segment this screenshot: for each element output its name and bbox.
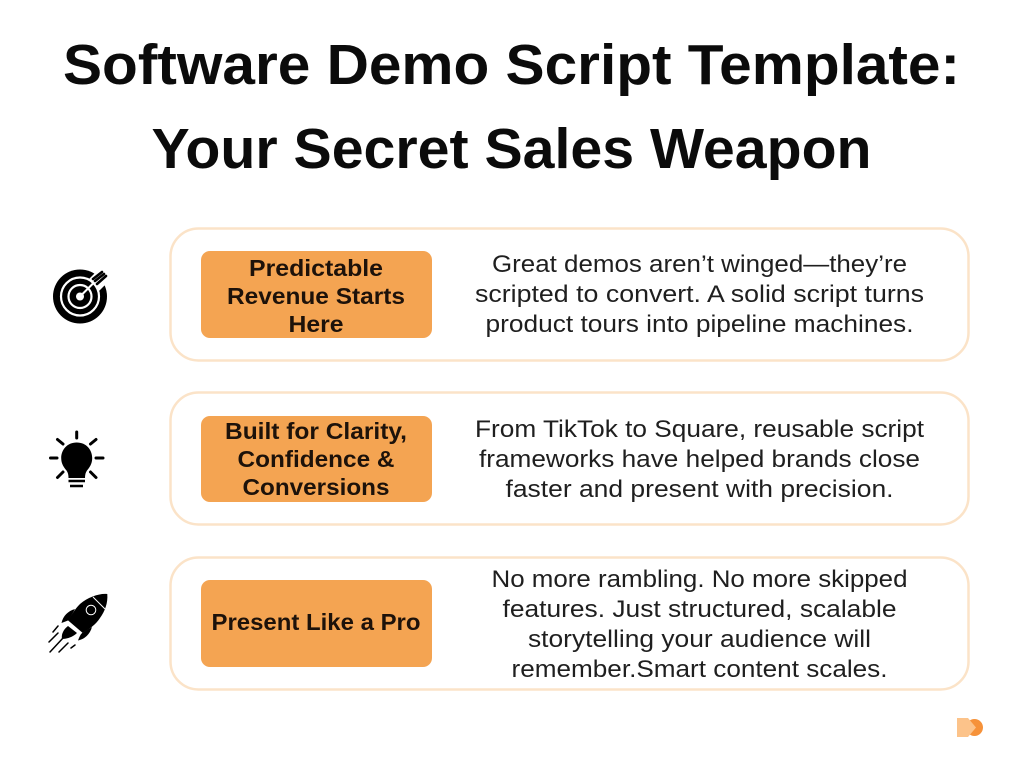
text: predictable revenue description: product tours into pipeline machines. xyxy=(486,311,914,338)
text: present description: remember.Smart content scales. xyxy=(512,656,888,683)
panel: clarity and confidence xyxy=(170,392,968,524)
text: predictable revenue description: scripted to convert. A solid script turns xyxy=(475,281,924,308)
text: present description: features. Just structured, scalable xyxy=(502,596,896,623)
text: present description xyxy=(492,566,908,683)
panel: predictable revenue xyxy=(170,228,968,360)
badge: predictable revenue: Revenue Starts xyxy=(227,283,405,309)
badge: clarity and confidence xyxy=(201,416,432,502)
icon: rocket xyxy=(49,594,107,652)
text: clarity description: faster and present with precision. xyxy=(506,476,894,503)
icon: light bulb xyxy=(50,432,103,486)
text: clarity description: From TikTok to Square, reusable script xyxy=(475,416,924,443)
text: predictable revenue description xyxy=(475,251,924,338)
title xyxy=(63,33,960,181)
badge: predictable revenue: Here xyxy=(288,311,344,337)
badge: present like a pro: Present Like a Pro xyxy=(212,609,420,635)
badge: predictable revenue: Predictable xyxy=(249,255,383,281)
logo xyxy=(957,718,983,737)
badge: clarity and confidence: Built for Clarity, xyxy=(225,418,407,444)
text: predictable revenue description: Great demos aren’t winged—they’re xyxy=(492,251,907,278)
icon: target with arrow xyxy=(53,269,110,324)
title: Your Secret Sales Weapon xyxy=(152,117,872,181)
badge: clarity and confidence: Confidence & xyxy=(238,446,394,472)
text: present description: No more rambling. No more skipped xyxy=(492,566,908,593)
panel: present like a pro xyxy=(170,558,968,690)
badge: predictable revenue xyxy=(201,251,432,338)
text: present description: storytelling your audience will xyxy=(528,626,871,653)
badge: clarity and confidence: Conversions xyxy=(242,474,390,500)
text: clarity description: frameworks have helped brands close xyxy=(479,446,920,473)
text: clarity description xyxy=(475,416,924,503)
badge: present like a pro xyxy=(201,580,432,667)
title: Software Demo Script Template: xyxy=(63,33,960,97)
